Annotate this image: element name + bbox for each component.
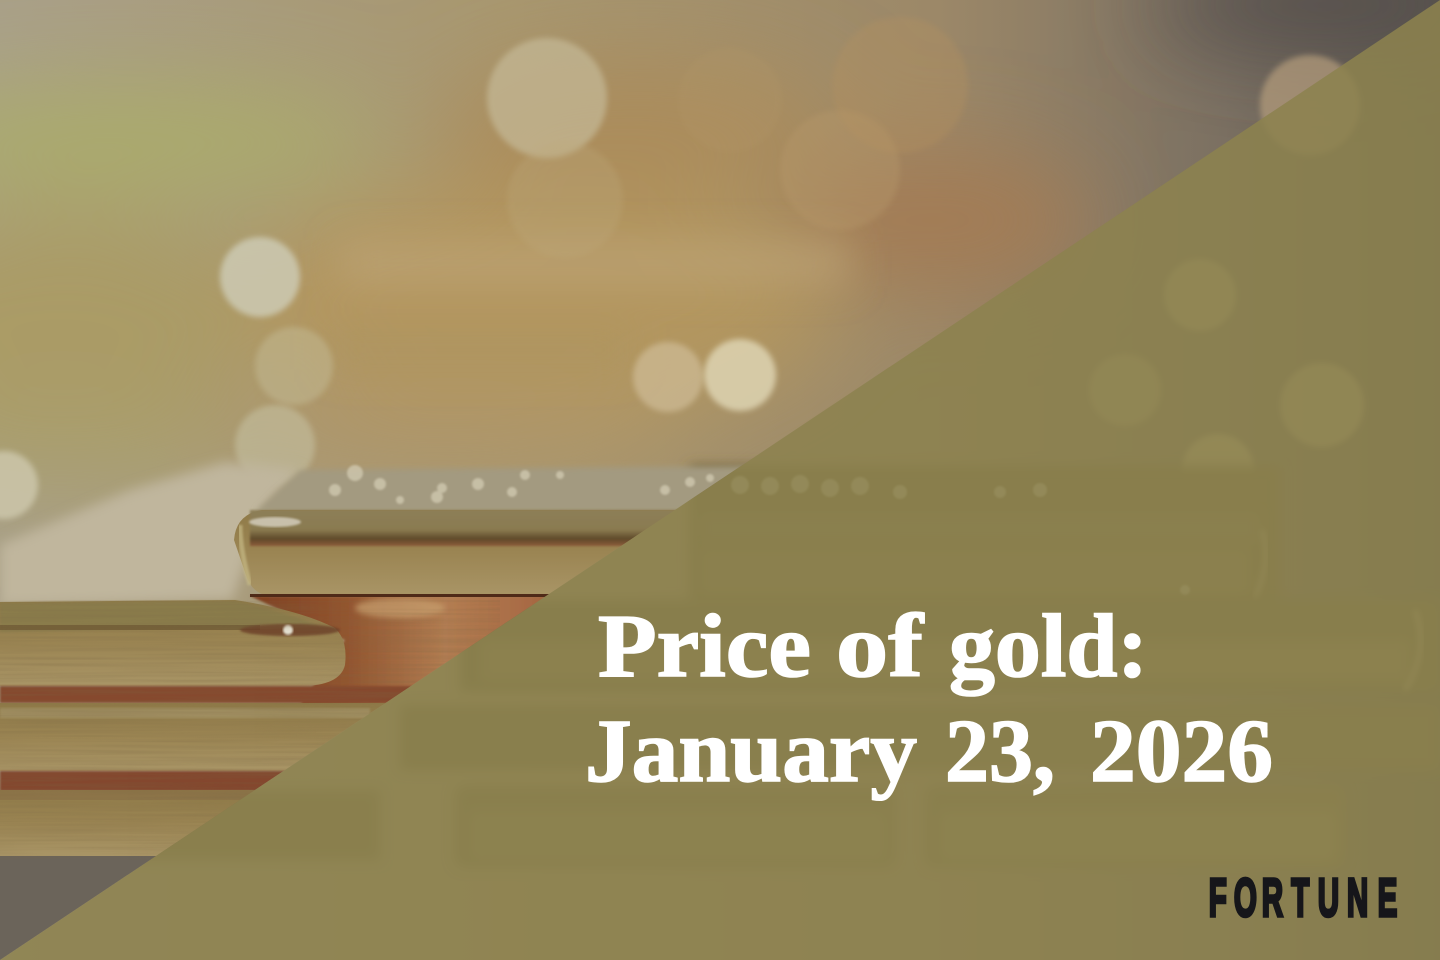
top bar upper surface with specks [255,466,760,512]
bar 2 [0,600,346,686]
red seam [0,686,470,703]
title line 2: January [585,702,917,801]
bokeh lights [0,17,1364,519]
title line 2: 2026 [1090,702,1273,801]
title line 1: gold: [949,597,1148,696]
pale sunlit bar top, left [0,462,300,606]
red seam lower [0,771,320,791]
horizontal highlight bands behind bars [330,240,850,370]
bar 4 [0,790,260,856]
title line 2 [585,702,1273,801]
table surface [0,856,160,960]
photo: stacked gold bars (left side, clipped at diagonal) [0,462,760,960]
title line 1 [598,597,1148,696]
title line 1: of [836,597,924,696]
bar 3 [0,703,420,771]
title line 1: Price [598,597,811,696]
title line 2: 23, [945,702,1055,801]
title [585,597,1273,801]
fine horizontal streaks on metal [21,600,500,770]
logo: FORTUNE: FORTUNE [1209,869,1397,929]
photo: gold bars behind overlay (right side) [0,466,1440,867]
bar 1 [234,510,674,594]
copper reflection between bars [250,597,544,703]
